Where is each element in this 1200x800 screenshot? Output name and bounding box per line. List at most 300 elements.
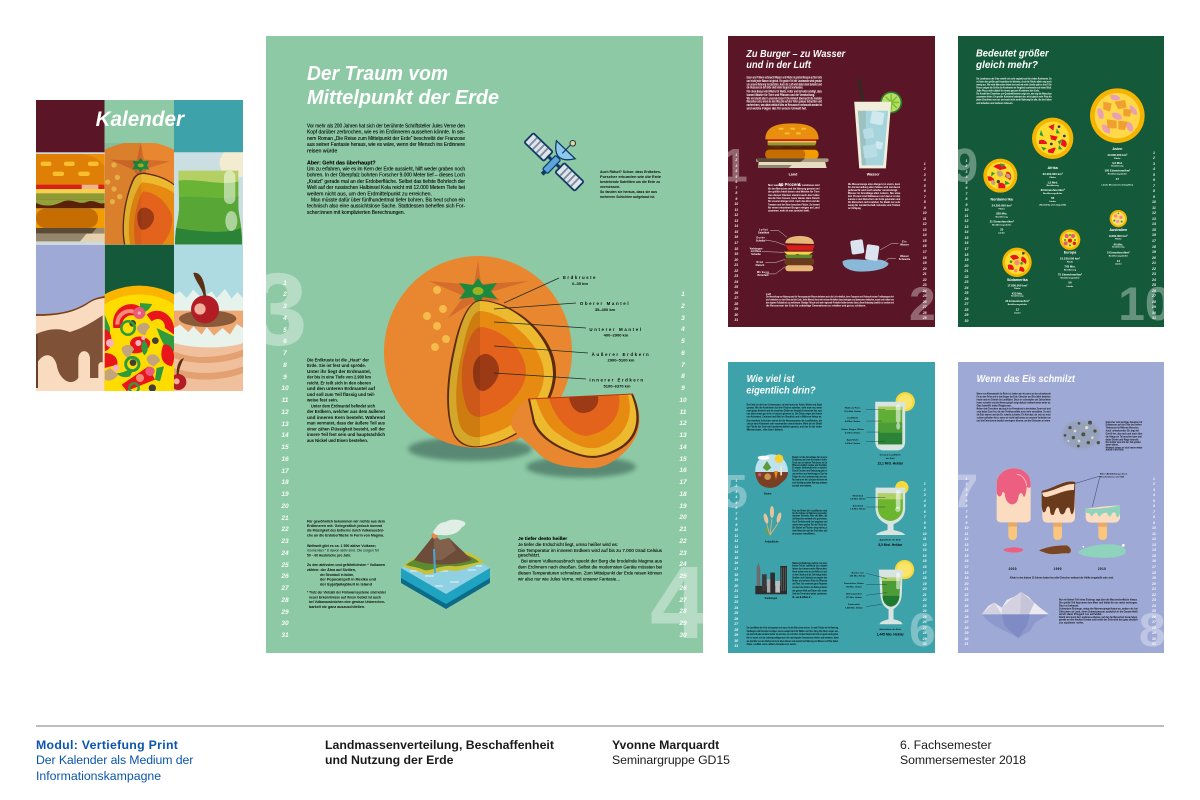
closing text — [746, 626, 839, 646]
day numbers: month 3: 28 — [281, 597, 289, 604]
day numbers: month 1: 1 — [735, 152, 737, 156]
day numbers: month 9: 12 — [965, 219, 968, 223]
illustration: glass 2 wine: Weideland — [853, 495, 864, 497]
illustration: layered burger with callouts: Scheibe — [756, 239, 766, 242]
continent stats: Fläche — [1067, 262, 1074, 264]
day numbers: month 8: 15 — [1152, 554, 1156, 558]
day numbers: month 7: 30 — [965, 637, 968, 641]
main heading: Mittelpunkt der Erde — [307, 86, 499, 109]
continent stats: Südamerika — [1007, 278, 1029, 282]
day numbers: month 1: 5 — [735, 175, 737, 179]
illustration: melting ice with callouts: Wasser — [900, 244, 909, 247]
continent stats: 5 Einwohner/km² — [1107, 251, 1130, 255]
text: farming — [765, 509, 828, 543]
intro text: Neben den Gletschern taut auch der Permafrost in den kalten Zonen auf und — [977, 407, 1051, 411]
day numbers: month 1: 4 — [735, 169, 737, 173]
day numbers: month 7: 3 — [966, 488, 967, 492]
continent stats: Bevölkerung — [1064, 269, 1077, 271]
day numbers: month 3: 27 — [281, 585, 289, 592]
day numbers: month 7: 19 — [965, 576, 968, 580]
day numbers: month 1: 3 — [735, 164, 737, 168]
continent stats: 23 — [1000, 228, 1004, 232]
intro text: nachrechnen, was dabei wirklich alles an Ressourcen verbraucht worden ist — [747, 103, 823, 107]
iceberg text: zu spüren sein. — [1059, 620, 1084, 624]
footer: author: Seminargruppe GD15 — [612, 753, 730, 767]
continent stats: Bevölkerungsdichte — [1060, 277, 1080, 280]
text: water: zur Verfügung. — [848, 206, 861, 210]
day numbers: month 6: 21 — [923, 593, 927, 597]
text: city: Heute wohnt mehr als die Hälfte von uns — [792, 570, 828, 573]
day numbers: month 8: 17 — [1152, 565, 1156, 569]
gravel text: Weltweit ziehen sie sich immer weiter — [1106, 446, 1142, 449]
day numbers: month 1: 30 — [734, 313, 738, 317]
day numbers: month 9: 16 — [965, 241, 968, 245]
gravel text: Gletscher sind wichtige Speicher für — [1106, 421, 1142, 424]
footnote text — [766, 292, 894, 308]
illustration: layered burger with callouts: Scheibe — [751, 253, 761, 256]
text: soil: Boden — [764, 493, 772, 495]
day numbers: month 2: 18 — [923, 256, 927, 260]
day numbers: month 7: 6 — [966, 504, 967, 508]
day numbers: month 7: 4 — [966, 493, 967, 497]
heading — [746, 374, 816, 397]
day numbers: month 2: 28 — [923, 311, 927, 315]
day numbers: month 4: 13 — [679, 432, 687, 439]
continent stats: Fläche — [1049, 177, 1057, 179]
gravel text: zurück in die Höhe. — [1106, 449, 1124, 451]
day numbers: month 6: 10 — [923, 532, 927, 536]
day numbers: month 4: 23 — [679, 550, 687, 556]
day numbers: month 4: 28 — [679, 608, 687, 615]
text: land — [768, 182, 820, 212]
intro text: ist Asien der größte und Australien der kleinste, doch die Fläche allein sagt noch — [976, 80, 1052, 84]
day numbers: month 4: 15 — [679, 456, 687, 462]
intro text: und welche Folgen das für unsere Umwelt hat. — [747, 106, 807, 110]
day numbers: month 3: 8 — [283, 362, 287, 369]
day numbers: month 1: 7 — [735, 186, 737, 190]
intro text: Pizzen zeigen die Größe der Kontinente im Vergleich zueinander auf einen Blick. — [976, 86, 1052, 90]
gravel text: dabei Dörfer und Wege bedroht. — [1106, 438, 1139, 441]
day numbers: month 3: 7 — [283, 350, 287, 357]
day numbers: month 8: 7 — [1153, 510, 1155, 514]
text: farming: die Menschen weltweit sehr gut kennen. — [792, 517, 827, 520]
illustration: glass 3 cocktail: Dauerkultur, Reben — [844, 582, 864, 585]
continent stats: Fläche — [1114, 158, 1121, 160]
illustration: melting ice with callouts: Eis — [902, 241, 907, 244]
continent stats: Australien — [1109, 228, 1127, 232]
day numbers: month 6: 6 — [924, 510, 926, 514]
gravel text: werden. — [1106, 444, 1120, 446]
day numbers: month 9: 8 — [966, 197, 967, 201]
day numbers: month 3: 16 — [281, 456, 289, 463]
text: city: Städte und Siedlungen nehmen nur einen — [792, 562, 828, 565]
day numbers: month 10: 16 — [1152, 233, 1156, 237]
day numbers: month 5: 4 — [735, 495, 737, 499]
continent stats: 17.800.000 km² — [1007, 283, 1027, 287]
satellite caption: bestehende Satelliten um die Erde zu — [600, 180, 661, 184]
intro text block: bohren. In der Oberpfalz bohrten Forscher 9.000 Meter tief – dieses Loch — [307, 172, 465, 178]
day numbers: month 10: 20 — [1152, 256, 1156, 260]
text: city — [765, 562, 828, 600]
crust text block: weise fest sein. — [306, 398, 338, 402]
volcano text block: 50 – 60 Ausbrüche pro Jahr. — [307, 553, 351, 557]
text: city: Straßen und Gebäude versiegeln den — [792, 576, 828, 579]
footer: module — [36, 738, 194, 783]
illustration: layered burger with callouts: Gurke — [756, 237, 765, 240]
text: soil: Es dauert Jahrhunderte bis er wächst. — [792, 467, 827, 470]
caption: Allein in den letzten 15 Jahren haben fast alle Gletscher weltweit die Hälfte eingebüßt oder sind. — [1010, 577, 1114, 580]
intro text: Die Anzahl der Einwohner pro Quadratkilometer zeigt uns, wie eng die Menschen — [976, 92, 1052, 96]
volcano text block: die Flüssigkeit des Erdkerns durch Vulkanausbrü- — [307, 529, 385, 533]
day numbers: month 10: 14 — [1152, 222, 1156, 226]
text: water: für Menschen nicht nutzbar. So bleibt nur sehr — [848, 200, 901, 204]
day numbers: month 3: 6 — [283, 338, 287, 345]
day numbers: month 8: 26 — [1152, 615, 1156, 619]
layer labels — [563, 275, 650, 388]
footer: project title: und Nutzung der Erde — [325, 753, 453, 767]
day numbers: month 8: 24 — [1152, 604, 1156, 608]
continent stats: 423 Mio. — [1012, 291, 1023, 295]
day numbers: month 9: 18 — [965, 253, 968, 257]
pizza tile — [104, 244, 174, 391]
day numbers: month 10: 15 — [1152, 228, 1156, 232]
continent stats: Bevölkerung — [1112, 247, 1125, 249]
panel: Bedeutet größer gleich mehr? — [958, 36, 1164, 327]
day numbers: month 6: 25 — [923, 615, 927, 619]
day numbers: month 3: 22 — [281, 526, 289, 533]
text: soil: Durch Erosion und Bebauung geht er — [792, 470, 827, 473]
crust text block: der Erdkern, welcher aus dem äußeren — [307, 409, 385, 414]
day numbers: month 2: 6 — [924, 189, 926, 193]
text: city: leben dort immer mehr Menschen. — [792, 567, 828, 570]
day numbers: month 5: 26 — [734, 617, 738, 621]
day numbers: month 3: 25 — [281, 562, 289, 568]
day numbers: month 10: 27 — [1152, 294, 1156, 298]
day numbers: month 1: 23 — [734, 274, 738, 278]
footer: semester: Sommersemester 2018 — [900, 753, 1026, 767]
continent stats: 30.200.000 km² — [1043, 172, 1063, 176]
illustration: layered burger with callouts: Brötchen — [758, 274, 769, 277]
crust text block: und den unteren Erdmantel auf — [307, 386, 376, 391]
text: land: das die Tiere fressen, bevor daraus dann Fleisch — [768, 196, 820, 200]
intro text: Die Erde ist nicht nur Lebensraum, sie wird auch als Acker, Weide und Stadt — [747, 402, 822, 406]
day numbers: month 5: 2 — [735, 484, 737, 488]
text: land: der größte Anteil davon sind Weiden für Tiere — [768, 189, 820, 193]
day numbers: month 3 — [281, 280, 289, 639]
day numbers: month 9: 13 — [965, 225, 968, 229]
illustration: glass 1 with layers: Landfläche — [847, 418, 859, 420]
day numbers: month 1: 6 — [735, 180, 737, 184]
day numbers: month 3: 26 — [281, 573, 289, 580]
shadows under the orange — [408, 437, 636, 478]
day numbers: month 2: 16 — [923, 244, 927, 248]
continent stats: 33 Einwohner/km² — [1041, 188, 1065, 192]
day numbers: month 1: 31 — [734, 318, 738, 322]
day numbers: month 7: 8 — [966, 515, 967, 519]
crust text block: Die Erdkruste ist die „Haut“ der — [307, 357, 369, 362]
satellite caption: So fanden sie heraus, dass sie aus — [600, 190, 657, 194]
continent stats: Bevölkerung — [1011, 296, 1024, 298]
day numbers: month 5: 22 — [734, 595, 738, 599]
day numbers: month 10: 22 — [1152, 267, 1156, 271]
day numbers: month 2: 14 — [923, 233, 927, 237]
day numbers: month 3: 3 — [283, 303, 287, 310]
illustration: glass 3 cocktail: Ackerfläche der Erde — [879, 628, 902, 631]
day numbers: month 9: 14 — [965, 230, 968, 234]
text: land: zusammen, mehr als man zunächst denkt. — [768, 208, 810, 212]
footer: module: Informationskampagne — [36, 769, 161, 783]
text: city: Leider. — [792, 596, 813, 599]
day numbers: month 4 — [679, 291, 687, 639]
footer: semester — [900, 738, 1026, 767]
day numbers: month 8: 16 — [1152, 559, 1156, 563]
continent stats: 44.600.000 km² — [1107, 153, 1127, 157]
day numbers: month 6: 23 — [923, 604, 927, 608]
crust text block — [306, 357, 385, 443]
intro text: um unsere Nahrung herzustellen. Auch die Luft wird dabei stark belastet und — [747, 82, 822, 86]
day numbers: month 8: 8 — [1153, 515, 1155, 519]
illustration labels: Land — [789, 172, 797, 176]
intro text: Jede Pizza steht dabei für einen ganzen Kontinent der Erde. — [976, 89, 1040, 93]
layer labels: 2900–5100 km — [608, 358, 635, 362]
day numbers: month 1: 20 — [734, 258, 738, 262]
day numbers: month 1: 29 — [734, 307, 738, 311]
continent stats: Länder — [1014, 313, 1021, 315]
day numbers: month 8: 23 — [1152, 598, 1156, 602]
crust text block: Unter ihr liegt der Erdmantel, — [307, 369, 371, 374]
day numbers: month 2: 17 — [923, 250, 927, 254]
day numbers: month 2 — [922, 162, 927, 320]
footer: project title — [325, 738, 554, 767]
day numbers: month 8: 18 — [1152, 571, 1156, 575]
day numbers: month 6: 11 — [923, 537, 926, 541]
text: water — [847, 182, 901, 210]
callout lines — [494, 278, 588, 379]
day numbers: month 7: 14 — [965, 548, 968, 552]
day numbers: month 6: 19 — [923, 582, 927, 586]
continent stats: 75 Einwohner/km² — [1058, 273, 1082, 277]
continent stats: Bevölkerung — [996, 216, 1008, 218]
day numbers: month 2: 20 — [923, 267, 927, 271]
closing text: Das sollte uns allen bewusst sein. — [747, 642, 797, 646]
day numbers: month 4: 5 — [681, 338, 685, 345]
day numbers: month 4: 25 — [679, 573, 687, 580]
day numbers: month 9: 5 — [966, 181, 967, 185]
continent stats: 23 Einwohner/km² — [1005, 299, 1029, 303]
text: city: in einer Stadt und die Zahl steigt weiter. — [792, 573, 827, 576]
day numbers: month 1: 2 — [735, 158, 737, 162]
layer labels: Äußerer Erdkern — [592, 352, 650, 357]
heading: gleich mehr? — [975, 60, 1038, 71]
day numbers: month 5: 27 — [734, 622, 738, 626]
intro text block: aus seiner Fantasie heraus, wie es wäre, wenn der Mensch ins Erdinnere — [307, 142, 465, 148]
text: land: Aus diesen Flächen stammt auch das Futter — [768, 193, 820, 197]
day numbers: month 1: 8 — [735, 191, 737, 195]
illustration: city skyline icon — [755, 563, 787, 594]
day numbers: month 7: 29 — [965, 631, 968, 635]
main heading — [307, 62, 499, 109]
day numbers: month 10: 26 — [1152, 289, 1156, 293]
text: farming: Fast ein Drittel aller Landflächen wird — [792, 509, 828, 512]
day numbers: month 3: 30 — [281, 620, 289, 627]
gravel text — [1106, 421, 1142, 451]
iceberg text: und den Pegel so erhöht. — [1059, 612, 1103, 616]
day numbers: month 8: 9 — [1153, 521, 1155, 525]
crust text block: reicht. Er teilt sich in den oberen — [307, 380, 371, 385]
gravel text: die Hänge ins Tal rutschen kann und — [1106, 435, 1142, 438]
day numbers: month 4: 22 — [679, 538, 687, 545]
day numbers: month 3: 13 — [281, 420, 289, 428]
day numbers: month 7: 28 — [965, 626, 968, 630]
iceberg text: Der größte Teil liegt unter dem Meer und bleibt für uns meist verborgen. — [1059, 601, 1138, 605]
day numbers: month 7: 27 — [965, 620, 968, 624]
layer labels: Unterer Mantel — [589, 327, 643, 332]
text: city: und Tiere. Das verändert ganze Regionen — [792, 583, 828, 586]
text: soil: Boden ist die Grundlage für unsere — [792, 456, 828, 459]
day numbers: month 8: 10 — [1152, 526, 1156, 530]
day numbers: month 3: 10 — [281, 385, 289, 392]
day numbers: month 5: 1 — [735, 478, 737, 482]
cover title: Kalender — [96, 108, 186, 131]
text block: Je tiefer desto heißer — [518, 536, 663, 582]
illustration: glass 1 with layers: Agrarfläche — [847, 439, 859, 442]
illustration: glass 2 wine: 5,0 Mrd. Hektar — [878, 543, 903, 547]
text: land: Tomaten und der Käse brauchen Fläche. So kommt — [768, 202, 820, 206]
volcano text block — [307, 519, 386, 609]
footer: author: Yvonne Marquardt — [612, 738, 719, 752]
day numbers: month 2: 11 — [923, 217, 926, 221]
day numbers: month 7: 9 — [966, 521, 967, 525]
pizza: Europa — [1060, 229, 1080, 250]
layer labels: Oberer Mantel — [580, 301, 630, 306]
day numbers: month 5: 15 — [734, 556, 738, 560]
day numbers: month 3: 12 — [281, 409, 289, 416]
text: farming: Anbaufläche — [765, 540, 779, 543]
illustration: glass 3 cocktail: 230 Mio. Hektar — [850, 575, 866, 578]
day numbers: month 5: 30 — [734, 639, 738, 643]
day numbers: month 4: 16 — [679, 467, 687, 474]
volcano text block: * Trotz der Vielzahl der Frühwarnsysteme sind leider — [307, 590, 386, 594]
continent stats: Bevölkerungsdichte — [992, 224, 1012, 227]
continent stats: Bevölkerung — [1111, 165, 1124, 167]
satellite caption: vermessen. — [600, 185, 620, 189]
intro text: Wie viel steckt also in unserem Essen? Die Antwort überrascht die meisten — [747, 96, 822, 100]
day numbers: month 6 — [922, 482, 927, 646]
text: land: für unseren Burger wird. Auch das Brot und die — [768, 199, 820, 203]
day numbers: month 4: 10 — [679, 397, 687, 404]
day numbers: month 2: 24 — [923, 289, 927, 293]
footer: module: Der Kalender als Medium der — [36, 753, 193, 767]
day numbers: month 1: 24 — [734, 280, 738, 284]
closing text: sie ebenfalls von den Flächen der Erde leben können und ausreichend Nahrung und Wasser und Platz haben. — [747, 639, 839, 643]
day numbers: month 9: 7 — [966, 192, 967, 196]
day numbers: month 1: 11 — [734, 208, 738, 212]
day numbers: month 2: 4 — [924, 178, 926, 182]
illustration: layered burger with callouts: Vorhängen — [750, 247, 763, 250]
intro text block: weitem nicht aus, um den Erdmittelpunkt zu erreichen. — [307, 191, 432, 197]
continent stats: Länder — [1049, 201, 1056, 203]
text: land: 50 Prozent — [779, 182, 801, 187]
intro text block: Kopf darüber zerbrochen, wie es im Erdinneren aussehen könnte. In sei- — [307, 130, 465, 136]
intro text: genutzt. Wie die Kontinente sich ihre Flächen aufteilen, sieht man erst, wenn — [747, 405, 822, 409]
day numbers: month 4: 3 — [681, 314, 685, 322]
day numbers: month 6: 8 — [924, 521, 926, 525]
callout for lollies: Eisschmelzens seit 1900 — [1100, 476, 1125, 479]
illustration: layered burger with callouts: Rind — [757, 261, 764, 264]
day numbers: month 4: 14 — [679, 444, 687, 451]
day numbers: month 6: 5 — [924, 504, 926, 508]
day numbers: month 10: 25 — [1152, 283, 1156, 287]
iceberg text: Gletschern an Land, deren Schmelzwasser zusätzlich in die Ozeane fließt — [1059, 609, 1138, 613]
day numbers: month 6: 14 — [923, 554, 927, 558]
day numbers: month 3: 11 — [282, 397, 288, 404]
gravel text: Geröll frei, das nach und nach über — [1106, 434, 1142, 436]
intro text: Die Landmasse der Erde verteilt sich sehr ungleich auf die sieben Kontinente. So — [976, 77, 1052, 81]
panel: Wenn das Eis schmilzt — [958, 362, 1164, 653]
day numbers: month 4: 26 — [679, 585, 687, 592]
day numbers: month 9: 24 — [965, 286, 968, 290]
day numbers: month 2: 15 — [923, 239, 927, 243]
icon: satellite — [517, 117, 600, 199]
continent stats: Bevölkerungsdichte — [1043, 192, 1063, 195]
day numbers: month 6: 13 — [923, 548, 927, 552]
day numbers: month 5: 10 — [734, 528, 738, 532]
day numbers: month 9: 26 — [965, 297, 968, 301]
volcano text block: Zu den aktivsten und gefährlichsten * Vulkanen — [307, 563, 386, 567]
text: soil: Folgen für die Landwirtschaft und uns. — [792, 475, 827, 478]
intro text: von Ackerland, Grünland und Wald im Überblick und in Millionen Hektar an. — [747, 413, 822, 418]
gravel text: Auch schmelzendes Eis legt viel — [1106, 429, 1139, 432]
day numbers: month 7: 18 — [965, 571, 968, 575]
pizza: Afrika — [1032, 118, 1073, 159]
iceberg text: Das ist bekannt. — [1059, 603, 1079, 607]
day numbers: month 7: 1 — [966, 476, 967, 480]
text block: Je tiefer desto heißer: dem Erdinnern nach draußen. Selbst die modernsten Geräte müssten bei — [518, 565, 662, 571]
continent stats: Fläche — [998, 209, 1006, 211]
continent stats: Asien — [1112, 147, 1122, 151]
day numbers: month 9: 19 — [965, 258, 968, 262]
text: city: und auch das Klima in den Ballungsräumen — [792, 586, 828, 589]
text: soil: und ernten. — [792, 484, 813, 487]
text: soil: Pflanzen wirklich nutzbar und fruchtbar. — [792, 464, 827, 467]
day numbers: month 2: 13 — [923, 228, 927, 232]
day numbers: month 3: 17 — [281, 468, 289, 474]
panel: Zu Burger – zu Wasser und in der Luft — [728, 36, 934, 327]
illustration: glass 1 with layers: 1,4 Mrd. Hektar — [845, 442, 860, 445]
illustration: ice lolly 1 — [997, 468, 1031, 540]
day numbers: month 5: 12 — [734, 539, 738, 543]
illustration: glass 1 with layers: Urban, Steppe, Wüste — [841, 428, 865, 431]
intro text — [977, 392, 1051, 423]
illustration: layered burger with callouts: Wirkung — [757, 271, 769, 274]
continent stats: Nordamerika — [990, 197, 1014, 201]
volcano text block: bei Vulkanausbrüchen eine gewisse Unberechen- — [309, 600, 386, 604]
day numbers: month 3: 23 — [281, 538, 289, 545]
day numbers: month 10: 9 — [1153, 195, 1155, 199]
day numbers: month 2: 25 — [923, 294, 927, 298]
day numbers: month 1: 10 — [734, 202, 738, 206]
continent stats: 10.180.000 km² — [1060, 257, 1080, 261]
day numbers: month 5: 14 — [734, 550, 738, 554]
day numbers: month 10: 24 — [1152, 278, 1156, 282]
day numbers: month 7: 12 — [965, 537, 968, 541]
day numbers: month 4: 17 — [679, 479, 687, 486]
day numbers: month 1: 9 — [735, 197, 737, 201]
day numbers: month 7: 2 — [966, 482, 967, 486]
continent stats: Fläche — [1014, 288, 1021, 290]
day numbers: month 9: 30 — [965, 319, 968, 323]
day numbers: month 3: 18 — [281, 479, 289, 486]
